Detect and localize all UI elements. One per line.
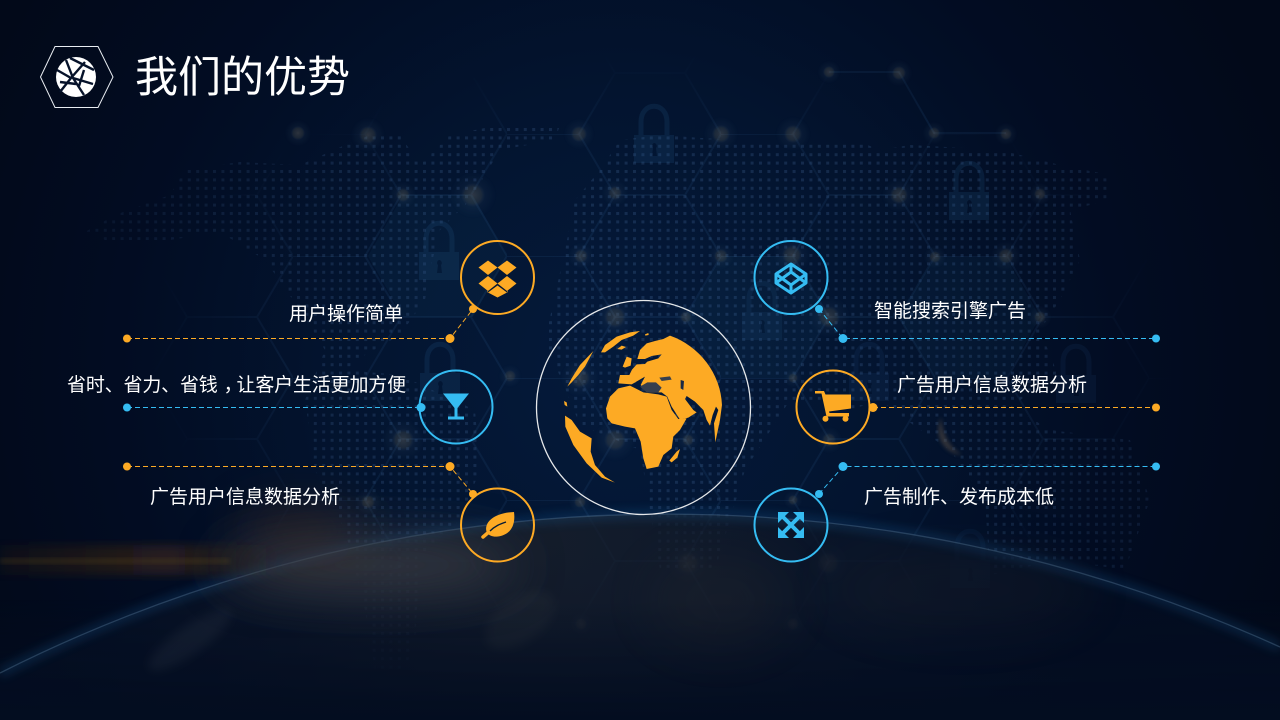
icon: dropbox bbox=[478, 260, 516, 298]
icon: expand arrows bbox=[778, 512, 804, 538]
icon: codepen cube bbox=[776, 264, 806, 293]
icon: cracked sphere bbox=[56, 57, 96, 97]
outer ring bbox=[536, 300, 750, 514]
globe bbox=[536, 300, 750, 514]
label: 用户操作简单: 用户操作简单 bbox=[289, 304, 403, 325]
lens flare bbox=[0, 504, 365, 575]
icon: cocktail glass bbox=[443, 394, 469, 420]
item: 广告用户信息数据分析 right graphics bbox=[796, 370, 1160, 444]
dotted world map bbox=[87, 128, 1148, 568]
label: 广告制作、发布成本低: 广告制作、发布成本低 bbox=[864, 487, 1054, 508]
planet horizon bbox=[0, 514, 1280, 720]
hexagon network lines bbox=[236, 108, 1088, 533]
item: 广告制作、发布成本低 graphics bbox=[754, 462, 1160, 562]
item: 用户操作简单 graphics bbox=[123, 241, 534, 343]
label: 广告用户信息数据分析 left: 广告用户信息数据分析 bbox=[150, 487, 340, 508]
lit hexagon cells bbox=[368, 195, 1040, 378]
title: 我们的优势 bbox=[135, 54, 350, 102]
item: 省时省力省钱 graphics bbox=[123, 370, 492, 444]
item: 广告用户信息数据分析 left graphics bbox=[123, 462, 534, 562]
crescent shape bbox=[939, 417, 962, 455]
logo hexagon bbox=[40, 46, 113, 108]
glowing network nodes bbox=[284, 59, 1052, 636]
label: 省时、省力、省钱: 省时、省力、省钱 ，让客户生活更加方便 bbox=[67, 375, 406, 396]
icon: shopping cart bbox=[815, 391, 851, 422]
item: 智能搜索引擎广告 graphics bbox=[754, 241, 1160, 343]
label: 广告用户信息数据分析 right: 广告用户信息数据分析 bbox=[897, 375, 1087, 396]
upper network segment bbox=[829, 72, 1006, 133]
continents bbox=[564, 331, 722, 483]
lock icons bbox=[419, 106, 1096, 588]
label: 智能搜索引擎广告: 智能搜索引擎广告 bbox=[874, 301, 1026, 322]
icon: leaf bbox=[483, 512, 514, 537]
